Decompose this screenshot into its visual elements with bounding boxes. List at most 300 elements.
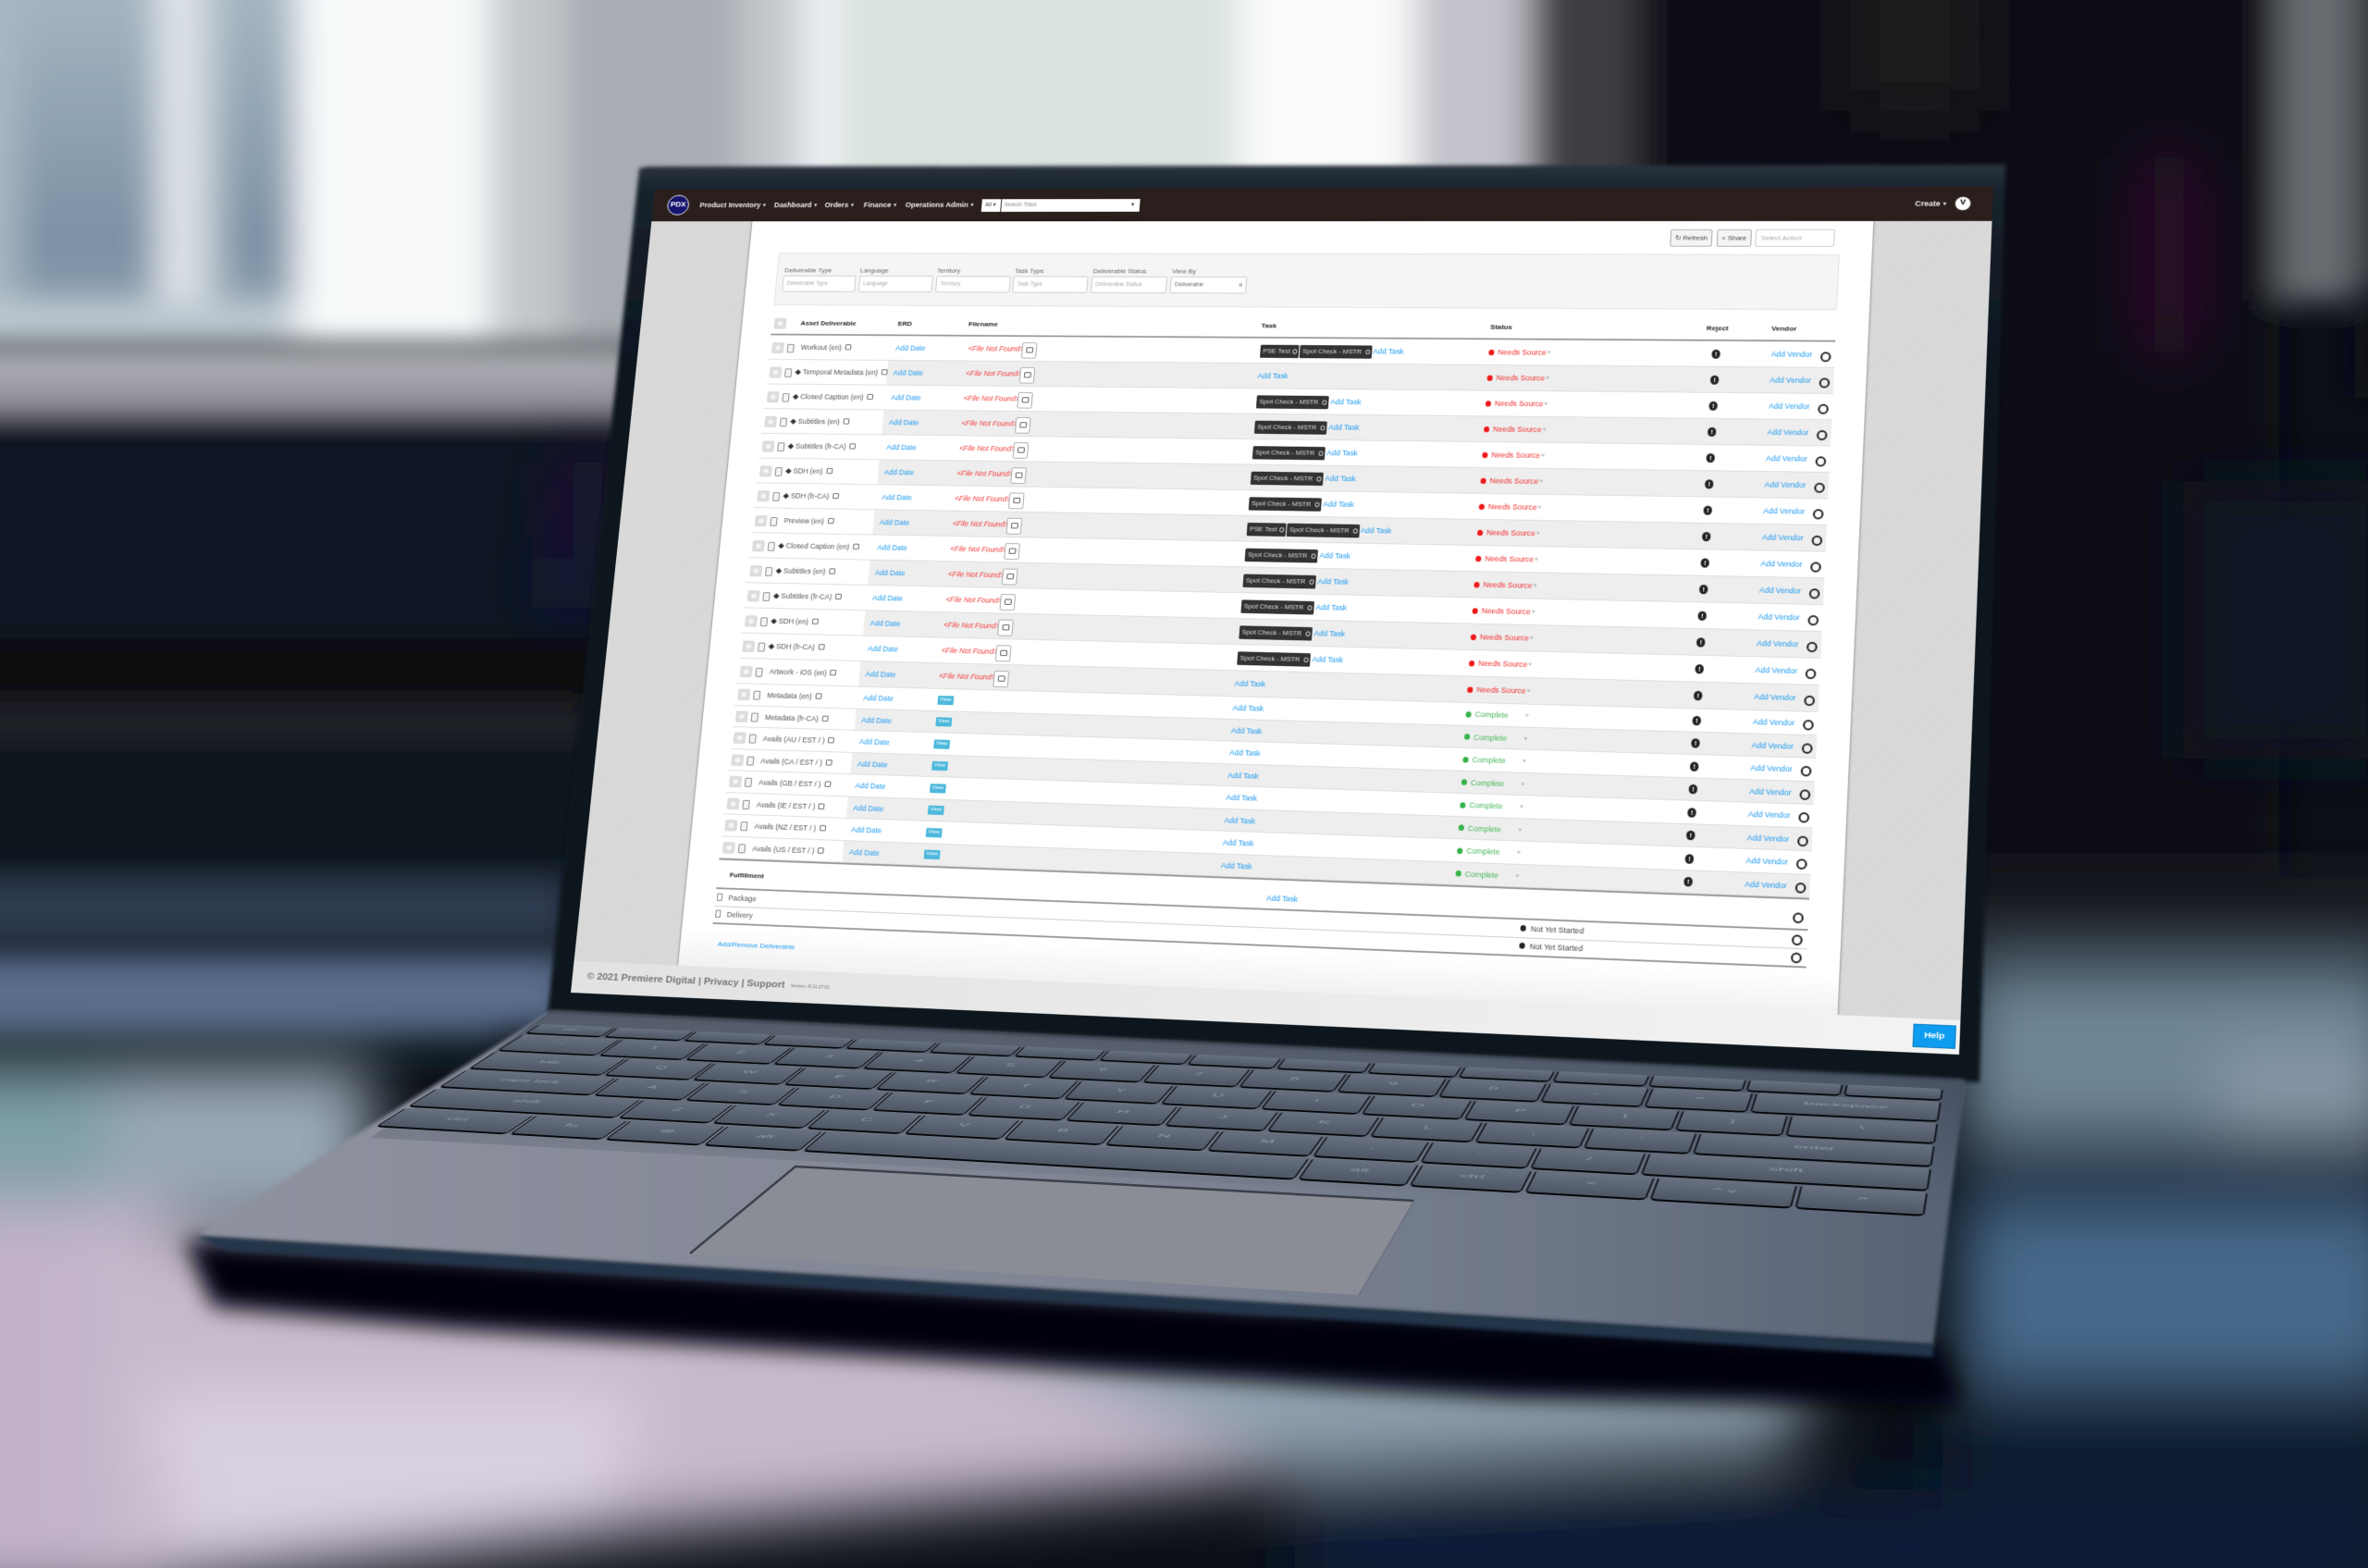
row: Avails US: ! [1686, 878, 1690, 886]
shift key row: , [1368, 1144, 1376, 1150]
row: Metadata (fr-CA): View [938, 719, 950, 724]
row: Avails CA: Add Vendor [1749, 786, 1792, 796]
row: Subtitles (en) [761, 409, 1832, 447]
row: Subtitles (fr-CA) 2: Add Date [872, 594, 903, 602]
row: Closed Caption (en) 2: Closed Caption (en) [785, 541, 850, 550]
filter: view by [1169, 267, 1247, 294]
row: SDH (fr-CA): v [1538, 505, 1541, 510]
bottom key row [376, 1108, 1928, 1216]
row: SDH (fr-CA): SDH (fr-CA) [790, 492, 830, 500]
row: Workout (en): Workout (en) [800, 343, 842, 352]
shift key row: Z [670, 1107, 685, 1112]
logo [666, 195, 690, 216]
row: Subtitles (fr-CA) 2 [744, 583, 1823, 632]
row: SDH (fr-CA) 2 [739, 633, 1820, 685]
laptop screen: dashboard: Reject [1707, 325, 1729, 332]
refresh button [1670, 229, 1713, 247]
shift key row: X [763, 1112, 779, 1117]
row: Closed Caption (en): ! [1712, 402, 1715, 410]
home key row [439, 1070, 1935, 1167]
row: Subtitles (en) 2: Needs Source [1483, 580, 1533, 590]
row: Avails AU: ! [1693, 762, 1696, 771]
shift key row: C [858, 1117, 875, 1123]
row: Avails AU: Add Task [1229, 748, 1261, 758]
laptop screen: dashboard: Deliverable Type [786, 281, 828, 287]
shelf and dark furniture on the left [0, 347, 648, 1064]
laptop screen: dashboard: Task Type [1017, 281, 1042, 288]
row: Subtitles (en): Needs Source [1493, 425, 1542, 434]
function key row: esc [561, 1028, 581, 1031]
row: Metadata (en): Add Date [863, 694, 894, 703]
laptop screen: dashboard: Asset Deliverable [800, 319, 857, 327]
row: SDH (en): Add Vendor [1765, 480, 1807, 489]
row: Avails NZ: Add Task [1223, 838, 1254, 847]
filter panel [773, 253, 1840, 310]
laptop screen: dashboard: Vendor [1771, 325, 1796, 332]
row: SDH (fr-CA): Add Task [1323, 500, 1354, 509]
QWERTY key row: ] [1729, 1118, 1735, 1124]
bottom key row: alt [754, 1134, 776, 1140]
row: Avails NZ [722, 814, 1811, 874]
row: Closed Caption (en) 2: Needs Source [1485, 554, 1534, 563]
row: SDH (en) 2: Spot Check - MSTR [1242, 628, 1302, 636]
row: Preview (en) [751, 508, 1827, 552]
table header [771, 318, 1836, 342]
row: Avails NZ: Add Vendor [1745, 856, 1788, 866]
row: Closed Caption (en): Add Task [1330, 398, 1362, 406]
row: SDH (fr-CA): Needs Source [1488, 502, 1537, 512]
row: Metadata (en): Add Vendor [1753, 718, 1794, 727]
laptop screen: dashboard: Task [1261, 322, 1277, 329]
bottom key row: ctrl [1459, 1173, 1486, 1179]
row: SDH (fr-CA) 2: v [1529, 662, 1532, 667]
row: Preview (en): Needs Source [1486, 528, 1536, 537]
row: Subtitles (fr-CA) [758, 434, 1831, 473]
row: Subtitles (fr-CA): Add Vendor [1766, 454, 1807, 463]
row: Closed Caption (en): Spot Check - MSTR [1259, 398, 1319, 405]
QWERTY key row: tab [536, 1059, 562, 1065]
row: Metadata (fr-CA): Add Vendor [1752, 740, 1794, 750]
share button: < Share [1721, 234, 1746, 241]
home key row: ' [1638, 1136, 1644, 1142]
row: Temporal Metadata (en): <File Not Found> [966, 369, 1022, 377]
row: Subtitles (fr-CA): ! [1709, 454, 1712, 462]
row: Subtitles (fr-CA) 2: Subtitles (fr-CA) [781, 592, 832, 601]
home key row: G [1017, 1105, 1034, 1109]
row: Metadata (fr-CA): Add Task [1231, 726, 1263, 735]
row: Closed Caption (en) 2: v [1535, 557, 1538, 562]
shift key row: shift [1769, 1167, 1804, 1174]
row: Metadata (en): Add Task [1232, 704, 1264, 713]
bottom key row: > [1856, 1195, 1868, 1202]
row: Subtitles (fr-CA) 2: Add Task [1315, 603, 1347, 612]
row: Subtitles (fr-CA): v [1541, 453, 1545, 458]
filter: territory [935, 267, 1011, 292]
row: Metadata (en): Metadata (en) [767, 691, 812, 700]
row: Subtitles (en) 2: v [1534, 583, 1536, 588]
home key row: ; [1530, 1130, 1537, 1136]
laptop screen: dashboard: Package [728, 894, 757, 903]
bottom key row: ^ v [1712, 1188, 1737, 1194]
select action [1755, 229, 1835, 247]
row: Closed Caption (en) 2: Add Date [877, 543, 907, 552]
row: Closed Caption (en) 2: Spot Check - MSTR [1248, 550, 1308, 559]
row: SDH (en) [756, 458, 1830, 499]
navigation bar: Operations Admin ▾ [906, 201, 973, 209]
row: Avails AU [730, 727, 1816, 782]
row: Avails US [720, 836, 1810, 898]
number key row: ~ [554, 1042, 568, 1046]
row: Workout (en): Needs Source [1498, 348, 1547, 356]
QWERTY key row: P [1513, 1108, 1527, 1114]
shift key row [409, 1089, 1931, 1191]
row: Metadata (en): v [1525, 713, 1529, 718]
row: Avails IE: View [930, 808, 942, 813]
row: Preview (en): <File Not Found> [952, 519, 1009, 528]
row: Artwork - iOS (en): ! [1696, 692, 1699, 699]
filter: deliverable type [782, 266, 857, 292]
row: Avails AU: Add Date [859, 737, 890, 747]
row: Preview (en): v [1536, 531, 1539, 536]
row: Subtitles (fr-CA): Add Date [886, 443, 917, 451]
number key row: 8 [1289, 1077, 1301, 1081]
row: Avails AU: v [1523, 759, 1526, 764]
home key row: caps lock [497, 1078, 562, 1085]
row: Avails NZ: View [928, 830, 940, 835]
QWERTY key row: U [1210, 1093, 1226, 1098]
laptop screen: dashboard: Not Yet Started [1531, 924, 1585, 935]
row: Metadata (fr-CA): v [1524, 735, 1527, 741]
row: Avails CA: Complete [1471, 778, 1504, 787]
number key row: 4 [912, 1058, 925, 1063]
row: Subtitles (en) 2: Subtitles (en) [783, 567, 826, 575]
row: SDH (en): Needs Source [1489, 476, 1539, 486]
laptop shadow [185, 1240, 1961, 1406]
shift key row: N [1156, 1133, 1172, 1139]
row: Temporal Metadata (en): Temporal Metadata (en) [802, 368, 879, 377]
row: SDH (en) 2 [741, 608, 1822, 659]
row: Closed Caption (en) 2: Add Task [1319, 551, 1350, 561]
user icon: v [1960, 197, 1967, 207]
number key row: 0 [1487, 1086, 1499, 1091]
laptop screen: dashboard: Language [860, 267, 889, 274]
row: Subtitles (fr-CA) 2: ! [1701, 612, 1704, 620]
row: SDH (en) 2: Add Date [870, 619, 901, 628]
number key row: 2 [734, 1050, 747, 1055]
laptop screen: dashboard: Task Type [1015, 267, 1044, 275]
desk reflections [0, 888, 2368, 1568]
row: SDH (fr-CA) 2: Add Vendor [1756, 666, 1797, 675]
filter: task type [1012, 267, 1088, 293]
row: Avails CA: Add Date [857, 759, 888, 769]
row: Avails GB [726, 771, 1814, 828]
row: Temporal Metadata (en) [766, 360, 1834, 394]
row: Avails US: Add Task [1221, 860, 1252, 870]
row: Avails AU: Add Vendor [1750, 763, 1793, 773]
shift key row: shift [510, 1099, 543, 1105]
trackpad [690, 1167, 1414, 1295]
row: SDH (en): <File Not Found> [956, 469, 1014, 478]
row: SDH (en): SDH (en) [793, 467, 823, 475]
laptop screen: dashboard: Filename [968, 320, 998, 327]
row: Avails GB: Add Task [1226, 793, 1257, 803]
row: Subtitles (en) 2: Add Date [875, 568, 906, 577]
row: Subtitles (fr-CA): <File Not Found> [959, 444, 1016, 453]
home key row: D [827, 1094, 844, 1099]
version text: Version: R.21.07.01 [791, 983, 830, 991]
shift key row: . [1475, 1151, 1484, 1156]
colored glows [550, 0, 2368, 759]
copyright text: © 2021 Premiere Digital | Privacy | Support [586, 971, 785, 990]
navigation bar: Finance ▾ [863, 201, 896, 209]
row: SDH (fr-CA) 2: ! [1698, 665, 1701, 673]
QWERTY key row: \ [1859, 1125, 1865, 1130]
QWERTY key row: Y [1114, 1088, 1128, 1093]
bottom key row: ⊞ [658, 1129, 677, 1134]
row: Subtitles (en) 2: <File Not Found> [948, 570, 1005, 579]
QWERTY key row: O [1410, 1103, 1425, 1108]
bottom key row: fn [561, 1123, 581, 1129]
row: Subtitles (en): Spot Check - MSTR [1257, 423, 1317, 431]
row: Subtitles (fr-CA): Add Task [1326, 449, 1358, 457]
row: Avails CA: Add Task [1227, 771, 1259, 780]
row: Artwork - iOS (en): v [1527, 688, 1530, 694]
row: Subtitles (fr-CA) 2: Spot Check - MSTR [1244, 602, 1304, 611]
row: SDH (en) 2: Add Vendor [1757, 639, 1799, 648]
row: Workout (en) [769, 335, 1835, 368]
create menu: Create ▾ [1915, 200, 1946, 208]
number key row: 3 [822, 1055, 835, 1059]
row: Avails IE: v [1519, 827, 1522, 833]
row: Preview (en): PSE Test [1250, 525, 1277, 533]
search box: Search Titles [1004, 203, 1037, 208]
front edge [196, 1236, 1933, 1357]
row: Artwork - iOS (en): <File Not Found> [939, 672, 996, 682]
shift key row: M [1258, 1139, 1276, 1144]
row: Closed Caption (en) 2 [748, 533, 1826, 578]
number key row: 6 [1097, 1068, 1110, 1072]
row: Avails IE: Complete [1468, 823, 1501, 833]
QWERTY key row: R [924, 1079, 940, 1084]
row: SDH (fr-CA): Add Date [882, 493, 912, 501]
row: Closed Caption (en) 2: ! [1704, 559, 1707, 567]
row: Avails IE: Avails (IE / EST / ) [757, 800, 816, 810]
home key row: S [734, 1090, 750, 1094]
row: Temporal Metadata (en): Add Task [1257, 372, 1289, 380]
row: Workout (en): ! [1715, 351, 1718, 358]
row: Avails GB: Add Vendor [1748, 809, 1791, 820]
row: Workout (en): <File Not Found> [968, 344, 1024, 352]
navigation bar: Product Inventory ▾ [699, 201, 766, 209]
laptop keyboard deck [196, 1011, 1965, 1357]
laptop screen: dashboard: Territory [940, 281, 961, 287]
row: Metadata (fr-CA): Metadata (fr-CA) [765, 713, 819, 722]
row: Avails US: Add Vendor [1745, 880, 1787, 890]
row: Metadata (fr-CA): Complete [1474, 733, 1507, 742]
row: Avails NZ: Complete [1466, 846, 1500, 857]
row: Metadata (en): ! [1696, 717, 1698, 724]
row: SDH (en) 2: v [1530, 636, 1534, 641]
laptop screen: dashboard: Deliverable Type [784, 266, 832, 274]
home key row: H [1115, 1109, 1131, 1115]
navigation bar: Dashboard ▾ [774, 201, 817, 209]
fulfillment section [712, 871, 1808, 969]
home key row: K [1317, 1119, 1332, 1125]
row: Subtitles (en): Add Vendor [1767, 428, 1808, 437]
row: Subtitles (en): <File Not Found> [961, 419, 1018, 427]
row: Temporal Metadata (en): ! [1713, 377, 1716, 384]
number key row: 7 [1191, 1072, 1204, 1077]
row: Preview (en): Spot Check - MSTR [1289, 525, 1350, 534]
row: Avails CA: View [934, 763, 946, 769]
row: Avails GB: View [932, 785, 944, 791]
row: Avails AU: Avails (AU / EST / ) [762, 735, 825, 745]
row: Artwork - iOS (en): Needs Source [1476, 685, 1526, 695]
row: Closed Caption (en): Closed Caption (en) [800, 392, 864, 401]
row: Avails GB: Add Date [855, 782, 886, 791]
row: Subtitles (en) 2: Add Task [1317, 577, 1349, 586]
row: Metadata (en): Complete [1474, 710, 1509, 720]
row: Workout (en): Add Vendor [1771, 350, 1813, 359]
footer bar [571, 961, 1960, 1055]
row: Closed Caption (en): <File Not Found> [963, 394, 1020, 402]
QWERTY key row: W [740, 1069, 759, 1075]
row: Subtitles (fr-CA) 2: Add Vendor [1758, 612, 1800, 622]
row: SDH (fr-CA) 2: <File Not Found> [941, 646, 998, 656]
row: Avails AU: Complete [1472, 755, 1506, 765]
bottom key row: alt [1349, 1167, 1371, 1173]
row: SDH (fr-CA): ! [1707, 507, 1709, 514]
share button [1717, 229, 1752, 247]
laptop screen: dashboard: Status [1490, 323, 1512, 331]
row: SDH (en) 2: Needs Source [1480, 633, 1529, 642]
row: Closed Caption (en) 2: <File Not Found> [950, 545, 1007, 554]
row: Subtitles (en): ! [1710, 428, 1713, 436]
row: Preview (en): Add Task [1361, 526, 1392, 535]
laptop screen: dashboard: Not Yet Started [1529, 942, 1584, 953]
row: Avails NZ: v [1517, 850, 1521, 856]
search box [1001, 199, 1141, 212]
row: Avails CA: v [1522, 782, 1524, 786]
home key row: F [922, 1099, 936, 1105]
row: Avails NZ: ! [1688, 855, 1691, 863]
row: Temporal Metadata (en): Needs Source [1496, 374, 1545, 382]
row: SDH (fr-CA): Spot Check - MSTR [1252, 500, 1312, 508]
number key row: 9 [1388, 1081, 1400, 1086]
row: SDH (fr-CA) 2: Add Task [1312, 655, 1344, 664]
function key row [525, 1024, 1943, 1101]
row: Preview (en): ! [1705, 533, 1708, 540]
row: Subtitles (en) 2: Add Vendor [1759, 586, 1801, 595]
row: Avails CA [728, 748, 1815, 805]
laptop screen: dashboard [571, 187, 1993, 1055]
row: Subtitles (en): Add Task [1328, 423, 1360, 432]
QWERTY key row: T [1018, 1083, 1032, 1089]
laptop screen: dashboard: Territory [937, 267, 961, 275]
row: SDH (fr-CA) 2: Needs Source [1478, 659, 1528, 669]
row: SDH (fr-CA) 2: SDH (fr-CA) [776, 642, 815, 651]
laptop screen: dashboard: View By [1172, 267, 1196, 275]
row: Workout (en): Add Date [895, 344, 926, 352]
row: Avails NZ: Avails (NZ / EST / ) [754, 822, 817, 833]
row: Subtitles (fr-CA): Spot Check - MSTR [1255, 448, 1315, 456]
row: Metadata (fr-CA): Add Date [861, 715, 892, 724]
row: SDH (en) 2: ! [1699, 638, 1702, 647]
row: Avails GB: Complete [1469, 801, 1503, 810]
QWERTY key row: E [832, 1074, 847, 1079]
shift key row: / [1585, 1156, 1593, 1162]
row: Avails GB: ! [1690, 809, 1694, 817]
row: Closed Caption (en): v [1545, 401, 1548, 406]
row: Artwork - iOS (en): Add Vendor [1754, 692, 1796, 702]
row: SDH (en) 2: Add Task [1314, 629, 1345, 638]
row: SDH (en): Add Task [1325, 475, 1356, 483]
row: Subtitles (en): Subtitles (en) [797, 417, 840, 426]
row: Preview (en): Add Date [880, 518, 910, 526]
row: Avails US: v [1516, 873, 1519, 878]
number key row: 5 [1004, 1063, 1017, 1068]
row: Workout (en): PSE Test [1263, 347, 1290, 354]
row: Avails GB: Avails (GB / EST / ) [758, 778, 821, 788]
laptop screen: dashboard: Language [863, 281, 888, 287]
row: Closed Caption (en) [763, 384, 1833, 420]
row: SDH (en): ! [1708, 480, 1710, 488]
row: Avails US: Add Date [849, 847, 880, 857]
row: Workout (en): Spot Check - MSTR [1302, 347, 1363, 355]
row: Metadata (fr-CA) [732, 705, 1817, 759]
row: Subtitles (en): Add Date [889, 418, 919, 426]
home key row: A [644, 1085, 660, 1090]
row: SDH (fr-CA) 2: Add Date [868, 645, 898, 653]
row: Closed Caption (en): Needs Source [1495, 400, 1544, 408]
row: Subtitles (en) 2: Spot Check - MSTR [1246, 576, 1306, 585]
QWERTY key row: I [1313, 1098, 1321, 1103]
row: Preview (en): Preview (en) [783, 516, 824, 525]
number key row: = [1694, 1096, 1706, 1101]
row: SDH (fr-CA): Add Vendor [1763, 507, 1805, 515]
row: Closed Caption (en) 2: Add Vendor [1760, 560, 1803, 569]
row: SDH (fr-CA) 2: Spot Check - MSTR [1240, 654, 1301, 662]
row: Subtitles (fr-CA): Subtitles (fr-CA) [796, 442, 846, 451]
logo: PDX [670, 201, 686, 208]
row: Preview (en): Add Vendor [1762, 533, 1804, 542]
number key row: 1 [648, 1046, 660, 1050]
row: SDH (fr-CA): <File Not Found> [955, 494, 1011, 503]
row: Subtitles (fr-CA) 2: Needs Source [1481, 607, 1531, 616]
home key row: enter [1793, 1144, 1836, 1152]
filter: language [858, 267, 933, 292]
row: Avails NZ: Add Date [851, 825, 882, 834]
row: Subtitles (en): v [1543, 427, 1546, 432]
row: Metadata (en): View [940, 698, 952, 702]
row: Avails IE: ! [1689, 832, 1692, 840]
row: SDH (en) 2: SDH (en) [778, 617, 808, 625]
row: Avails IE: Add Date [853, 803, 884, 812]
row: Avails GB: v [1520, 804, 1523, 809]
row: Avails IE: Add Vendor [1747, 833, 1789, 843]
QWERTY key row: [ [1622, 1114, 1629, 1118]
nav menu items [699, 201, 975, 209]
select action: Select Action [1761, 234, 1802, 241]
row: Avails CA: ! [1692, 785, 1695, 794]
bottom key row: < [1585, 1180, 1597, 1186]
row: Workout (en): v [1548, 350, 1550, 355]
help button: Help [1924, 1031, 1945, 1042]
row: Closed Caption (en): Add Vendor [1769, 401, 1810, 411]
navigation bar: Orders ▾ [824, 201, 854, 209]
row: Temporal Metadata (en): v [1546, 376, 1549, 380]
row: SDH (en): Spot Check - MSTR [1253, 474, 1314, 482]
